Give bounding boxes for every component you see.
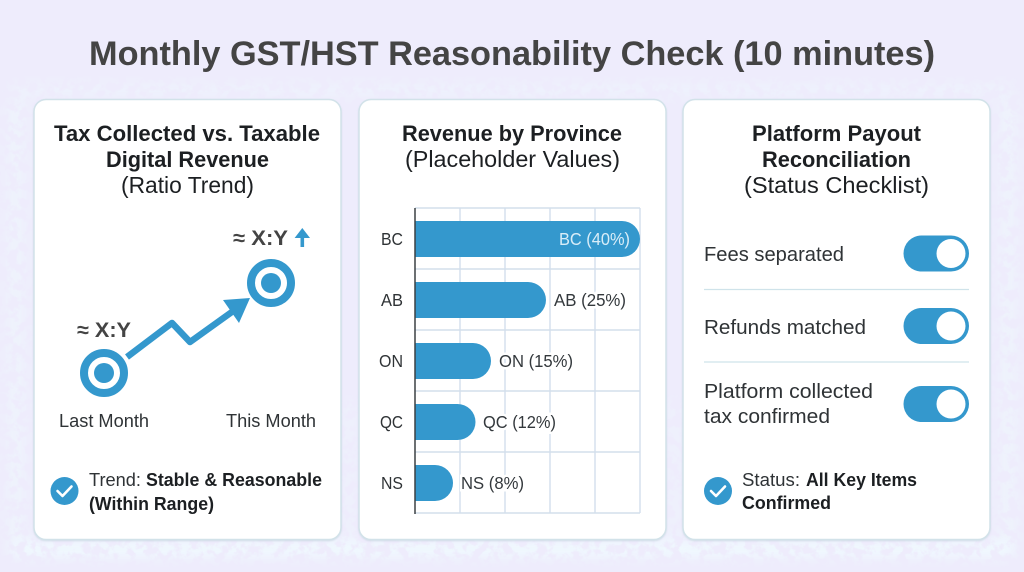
category labels: AB (381, 290, 403, 310)
label: this month: This Month (226, 410, 316, 431)
ratio label: this month: ≈ X:Y (233, 227, 288, 250)
heading: platform payout reconciliation: (Status Checklist) (744, 172, 929, 198)
panel: revenue by province (359, 100, 666, 540)
category labels (379, 229, 403, 493)
icon: status check badge (704, 477, 732, 505)
trend status text: Trend: (89, 469, 141, 490)
checklist item: fees separated: Fees separated (704, 243, 844, 266)
status text: Confirmed (742, 492, 831, 513)
panel: tax ratio trend (34, 100, 341, 540)
heading: tax collected vs taxable revenue: (Ratio Trend) (121, 172, 254, 198)
label: last month: Last Month (59, 410, 149, 431)
value labels: AB (25%) (554, 290, 626, 310)
icon: check badge (50, 477, 78, 505)
value labels: QC (12%) (483, 412, 556, 432)
heading: platform payout reconciliation: Platform Payout (752, 121, 921, 146)
bar: QC (415, 404, 476, 440)
status text (742, 469, 917, 513)
toggle: platform collected tax confirmed (904, 386, 969, 422)
trend status text: (Within Range) (89, 493, 214, 514)
heading: tax collected vs taxable revenue: Digital Revenue (106, 147, 269, 172)
category labels: NS (381, 473, 403, 493)
category labels: ON (379, 351, 403, 371)
status text: All Key Items (806, 469, 917, 490)
bar: ON (415, 343, 491, 379)
bar: BC (415, 221, 640, 257)
value labels: BC (40%) (559, 229, 630, 249)
marker: this month (251, 263, 291, 303)
icon: small up arrow (295, 228, 310, 247)
heading: tax collected vs taxable revenue (54, 121, 320, 198)
panel: platform payout reconciliation (683, 100, 990, 540)
checklist item: platform collected tax confirmed: tax confirmed (704, 405, 830, 428)
heading: revenue by province (402, 121, 622, 172)
status text: Status: (742, 469, 800, 490)
category labels: BC (381, 229, 403, 249)
checklist item: platform collected tax confirmed: Platform collected (704, 380, 873, 403)
bar chart (379, 208, 640, 514)
value labels: NS (8%) (461, 473, 524, 493)
title: Monthly GST/HST Reasonability Check (10 minutes) (89, 35, 935, 73)
marker: last month (84, 353, 124, 393)
heading: tax collected vs taxable revenue: Tax Collected vs. Taxable (54, 121, 320, 146)
ratio label: last month: ≈ X:Y (77, 319, 131, 342)
trend status text: Stable & Reasonable (146, 469, 322, 490)
arrow: rising trend line (127, 298, 250, 357)
trend status text (89, 469, 322, 514)
checklist item: platform collected tax confirmed (704, 380, 873, 428)
checklist item: refunds matched: Refunds matched (704, 316, 866, 339)
toggle: refunds matched (904, 308, 969, 344)
bar: NS (415, 465, 453, 501)
value labels: ON (15%) (499, 351, 573, 371)
heading: platform payout reconciliation (744, 121, 929, 198)
heading: revenue by province: Revenue by Province (402, 121, 622, 146)
heading: platform payout reconciliation: Reconciliation (762, 147, 911, 172)
heading: revenue by province: (Placeholder Values) (405, 146, 620, 172)
category labels: QC (380, 412, 403, 432)
value labels (461, 229, 630, 493)
bar: AB (415, 282, 546, 318)
toggle: fees separated (904, 236, 969, 272)
